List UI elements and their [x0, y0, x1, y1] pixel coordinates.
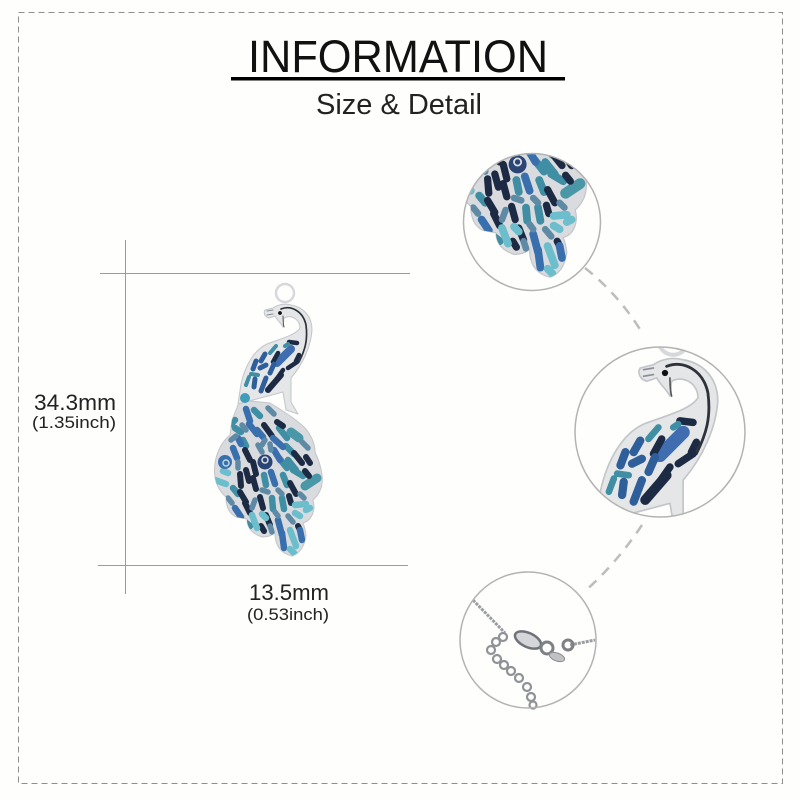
width label: 13.5mm: [249, 580, 329, 605]
height label: [32, 390, 116, 432]
width label: [247, 580, 329, 624]
height label: (1.35inch): [32, 413, 116, 432]
dimension lines: [98, 240, 410, 594]
dashed connector upper: [585, 268, 641, 331]
subtitle: Size & Detail: [316, 89, 482, 121]
detail circle: tail: [462, 152, 602, 292]
height label: 34.3mm: [34, 390, 116, 415]
title: INFORMATION: [248, 31, 548, 82]
peacock pendant: [214, 284, 322, 556]
dashed connector lower: [584, 525, 642, 592]
detail circle: chain and clasp: [460, 572, 596, 708]
width label: (0.53inch): [247, 605, 329, 624]
detail circle: head and body: [574, 346, 746, 518]
